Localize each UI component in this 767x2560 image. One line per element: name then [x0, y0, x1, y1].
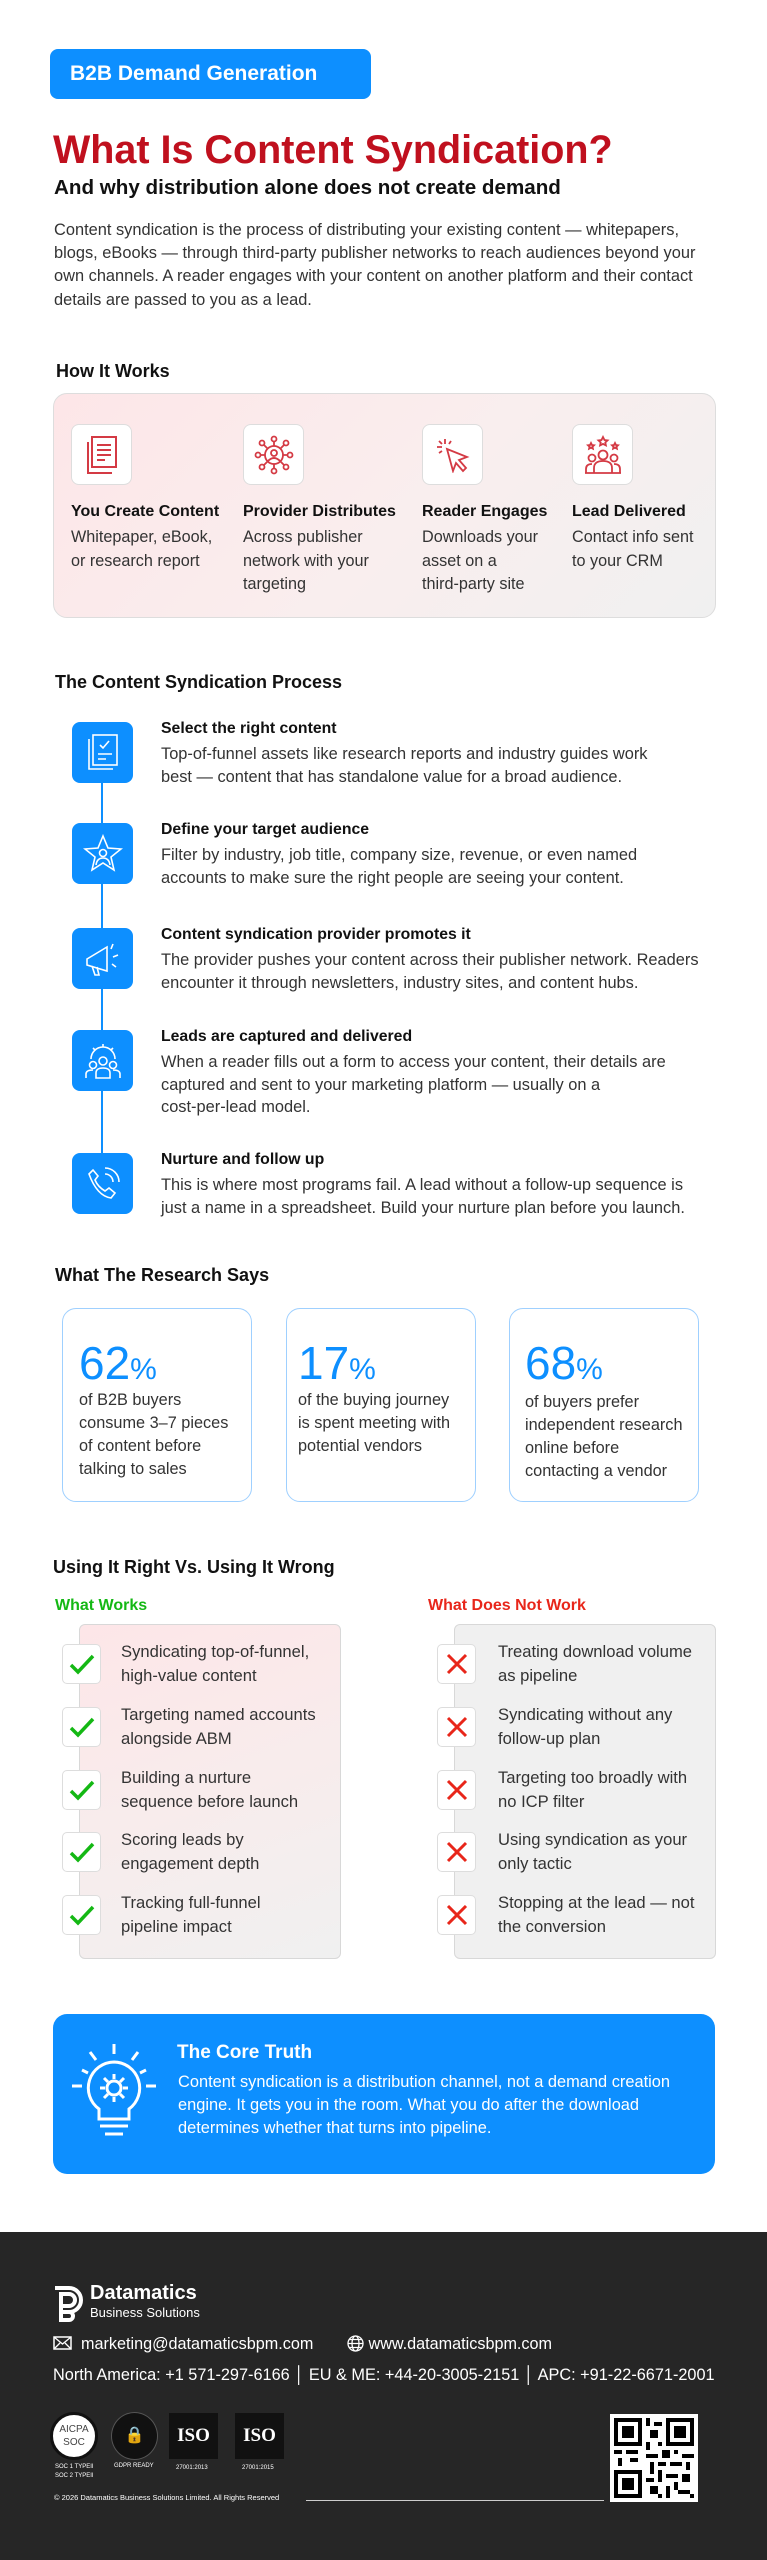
panel: what does not work: Treating download volume — [498, 1642, 692, 1661]
panel: what works — [62, 1624, 341, 1959]
panel: what works: high-value content — [121, 1666, 257, 1685]
panel: what does not work: follow-up plan — [498, 1729, 600, 1748]
stat card: 17% — [286, 1308, 476, 1502]
subtitle: And why distribution alone does not create demand — [54, 176, 561, 199]
stat card: 62%: consume 3–7 pieces — [79, 1414, 228, 1432]
footer — [0, 2232, 767, 2560]
icon: team with stars — [572, 424, 633, 485]
icon: document — [71, 424, 132, 485]
item 2 — [437, 1705, 672, 1748]
item 4 — [62, 1830, 259, 1873]
stat card: 68%: online before — [525, 1439, 619, 1457]
icon: lightbulb gear — [72, 2044, 156, 2136]
icon: checklist — [72, 722, 133, 783]
certification badges — [50, 2412, 284, 2479]
step: Provider Distributes: targeting — [243, 575, 306, 593]
heading: Using It Right Vs. Using It Wrong: Using It Right Vs. Using It Wrong — [53, 1557, 335, 1577]
panel: what does not work: Syndicating without any — [498, 1705, 672, 1724]
process timeline: encounter it through newsletters, industry sites, and content hubs. — [161, 974, 638, 992]
step: Lead Delivered — [572, 424, 694, 570]
stat card: 62%: 62% — [79, 1337, 157, 1389]
panel: what works: Scoring leads by — [121, 1830, 244, 1849]
step: Lead Delivered: Contact info sent — [572, 528, 693, 546]
panel: what does not work: as pipeline — [498, 1666, 577, 1685]
item 1 — [62, 1642, 309, 1685]
badge: B2B Demand Generation — [50, 49, 371, 99]
step: Lead Delivered: to your CRM — [572, 552, 663, 570]
certification badges: 27001:2013 — [176, 2465, 208, 2471]
step: Reader Engages: third-party site — [422, 575, 525, 593]
panel: what does not work: the conversion — [498, 1917, 606, 1936]
step: You Create Content: or research report — [71, 552, 200, 570]
stat card: 17%: of the buying journey — [298, 1391, 449, 1409]
icon: network — [243, 424, 304, 485]
stat card: 62%: of content before — [79, 1437, 201, 1455]
contact: web: www.datamaticsbpm.com — [368, 2335, 552, 2353]
item 3 — [62, 1768, 298, 1811]
step 2 — [72, 821, 637, 886]
panel: what works: sequence before launch — [121, 1792, 298, 1811]
step 1 — [72, 720, 648, 786]
item 2 — [62, 1705, 316, 1748]
process timeline: Define your target audience — [161, 821, 369, 838]
process timeline: cost-per-lead model. — [161, 1098, 310, 1116]
copyright: © 2026 Datamatics Business Solutions Limited. All Rights Reserved — [54, 2493, 279, 2502]
process timeline: Top-of-funnel assets like research reports and industry guides work — [161, 745, 648, 763]
item 5 — [437, 1893, 694, 1936]
icon: star person — [72, 823, 133, 884]
item 3 — [437, 1768, 687, 1811]
panel: how it works — [53, 393, 716, 618]
certification badges: GDPR READY — [114, 2463, 154, 2469]
step: Provider Distributes: network with your — [243, 552, 369, 570]
heading: How It Works: How It Works — [56, 361, 170, 381]
certification badges: SOC 1 TYPEII — [55, 2464, 94, 2470]
step: Provider Distributes — [243, 424, 396, 593]
intro paragraph: Content syndication is the process of distributing your existing content — whitepapers, — [54, 221, 679, 239]
certification badges: ISO — [177, 2425, 210, 2446]
stat card: 68% — [509, 1308, 699, 1502]
icon: megaphone — [72, 928, 133, 989]
item 4 — [437, 1830, 687, 1873]
intro paragraph: blogs, eBooks — through third-party publisher networks to reach audiences beyond your — [54, 244, 695, 262]
callout text: engine. It gets you in the room. What you do after the download — [178, 2096, 639, 2114]
item 1 — [437, 1642, 692, 1685]
step: You Create Content: Whitepaper, eBook, — [71, 528, 212, 546]
step: You Create Content — [71, 424, 219, 570]
process timeline: Nurture and follow up — [161, 1151, 324, 1168]
intro paragraph: own channels. A reader engages with your content on another platform and their contact — [54, 267, 693, 285]
step: Provider Distributes: Across publisher — [243, 528, 363, 546]
process timeline: accounts to make sure the right people are seeing your content. — [161, 868, 624, 886]
step: Reader Engages — [422, 424, 547, 593]
heading: The Content Syndication Process: The Content Syndication Process — [55, 672, 342, 692]
certification badges: AICPA — [59, 2424, 89, 2435]
process timeline: just a name in a spreadsheet. Build your nurture plan before you launch. — [161, 1198, 685, 1216]
callout: The Core Truth — [53, 2014, 715, 2174]
QR code — [610, 2414, 698, 2502]
certification badges: SOC — [63, 2437, 85, 2448]
panel: what works: Tracking full-funnel — [121, 1893, 261, 1912]
step: Lead Delivered: Lead Delivered — [572, 503, 686, 520]
panel: what works: engagement depth — [121, 1854, 259, 1873]
intro paragraph: details are passed to you as a lead. — [54, 291, 312, 309]
stat card: 68%: contacting a vendor — [525, 1462, 667, 1480]
process timeline: Content syndication provider promotes it — [161, 926, 471, 943]
step 5 — [72, 1151, 685, 1216]
panel: what does not work: Using syndication as your — [498, 1830, 687, 1849]
contact: email: marketing@datamaticsbpm.com — [81, 2335, 313, 2353]
stat card: 68%: of buyers prefer — [525, 1393, 639, 1411]
process timeline: Filter by industry, job title, company size, revenue, or even named — [161, 846, 637, 864]
stat card: 17%: potential vendors — [298, 1437, 422, 1455]
callout title: The Core Truth — [177, 2042, 312, 2063]
logo: Datamatics — [55, 2282, 200, 2322]
step: Reader Engages: Reader Engages — [422, 503, 547, 520]
process timeline: Leads are captured and delivered — [161, 1028, 412, 1045]
certification badges: SOC 2 TYPEII — [55, 2473, 94, 2479]
step 4 — [72, 1028, 666, 1116]
panel: what works: Syndicating top-of-funnel, — [121, 1642, 309, 1661]
panel: what works: alongside ABM — [121, 1729, 232, 1748]
panel: what works: Targeting named accounts — [121, 1705, 316, 1724]
stat card: 62%: talking to sales — [79, 1460, 187, 1478]
certification badges: 🔒 — [125, 2427, 144, 2444]
logo: Datamatics: Datamatics — [90, 2282, 197, 2304]
process timeline: Select the right content — [161, 720, 337, 737]
stat card: 62%: of B2B buyers — [79, 1391, 181, 1409]
panel: what does not work: no ICP filter — [498, 1792, 584, 1811]
step: Reader Engages: Downloads your — [422, 528, 538, 546]
step 3 — [72, 926, 699, 992]
subheading: What Does Not Work: What Does Not Work — [428, 1597, 586, 1614]
connector line — [101, 762, 103, 1182]
subheading: What Works: What Works — [55, 1597, 147, 1614]
callout text: Content syndication is a distribution channel, not a demand creation — [178, 2073, 670, 2091]
process timeline: captured and sent to your marketing platform — usually on a — [161, 1076, 600, 1094]
panel: what works: pipeline impact — [121, 1917, 232, 1936]
certification badges: 27001:2015 — [242, 2465, 274, 2471]
logo: Datamatics: Business Solutions — [90, 2305, 200, 2320]
callout text: determines whether that turns into pipeline. — [178, 2119, 491, 2137]
process timeline: This is where most programs fail. A lead without a follow-up sequence is — [161, 1176, 683, 1194]
item 5 — [62, 1893, 261, 1936]
process timeline: best — content that has standalone value for a broad audience. — [161, 768, 622, 786]
icon: phone — [72, 1153, 133, 1214]
process timeline: The provider pushes your content across their publisher network. Readers — [161, 951, 699, 969]
title: What Is Content Syndication? — [53, 128, 613, 172]
stat card: 17%: is spent meeting with — [298, 1414, 450, 1432]
intro paragraph — [54, 221, 696, 309]
contact: phone numbers: North America: +1 571-297-6166 │ EU & ME: +44-20-3005-2151 │ APC: +91-22-6671-2001 — [53, 2366, 715, 2384]
stat card: 17%: 17% — [298, 1337, 376, 1389]
process timeline: When a reader fills out a form to access your content, their details are — [161, 1053, 666, 1071]
panel: what works: Building a nurture — [121, 1768, 251, 1787]
icon: gear people — [72, 1030, 133, 1091]
certification badges: ISO — [243, 2425, 276, 2446]
icon: cursor — [422, 424, 483, 485]
step: You Create Content: You Create Content — [71, 503, 219, 520]
step: Provider Distributes: Provider Distributes — [243, 503, 396, 520]
stat card: 62% — [62, 1308, 252, 1502]
heading: What The Research Says: What The Research Says — [55, 1265, 269, 1285]
stat card: 68%: 68% — [525, 1337, 603, 1389]
stat card: 68%: independent research — [525, 1416, 683, 1434]
panel: what does not work — [437, 1624, 716, 1959]
badge: B2B Demand Generation: B2B Demand Generation — [70, 62, 317, 85]
panel: what does not work: Stopping at the lead — not — [498, 1893, 694, 1912]
process timeline — [72, 720, 699, 1216]
step: Reader Engages: asset on a — [422, 552, 497, 570]
callout text — [178, 2073, 670, 2137]
panel: what does not work: only tactic — [498, 1854, 572, 1873]
panel: what does not work: Targeting too broadly with — [498, 1768, 687, 1787]
